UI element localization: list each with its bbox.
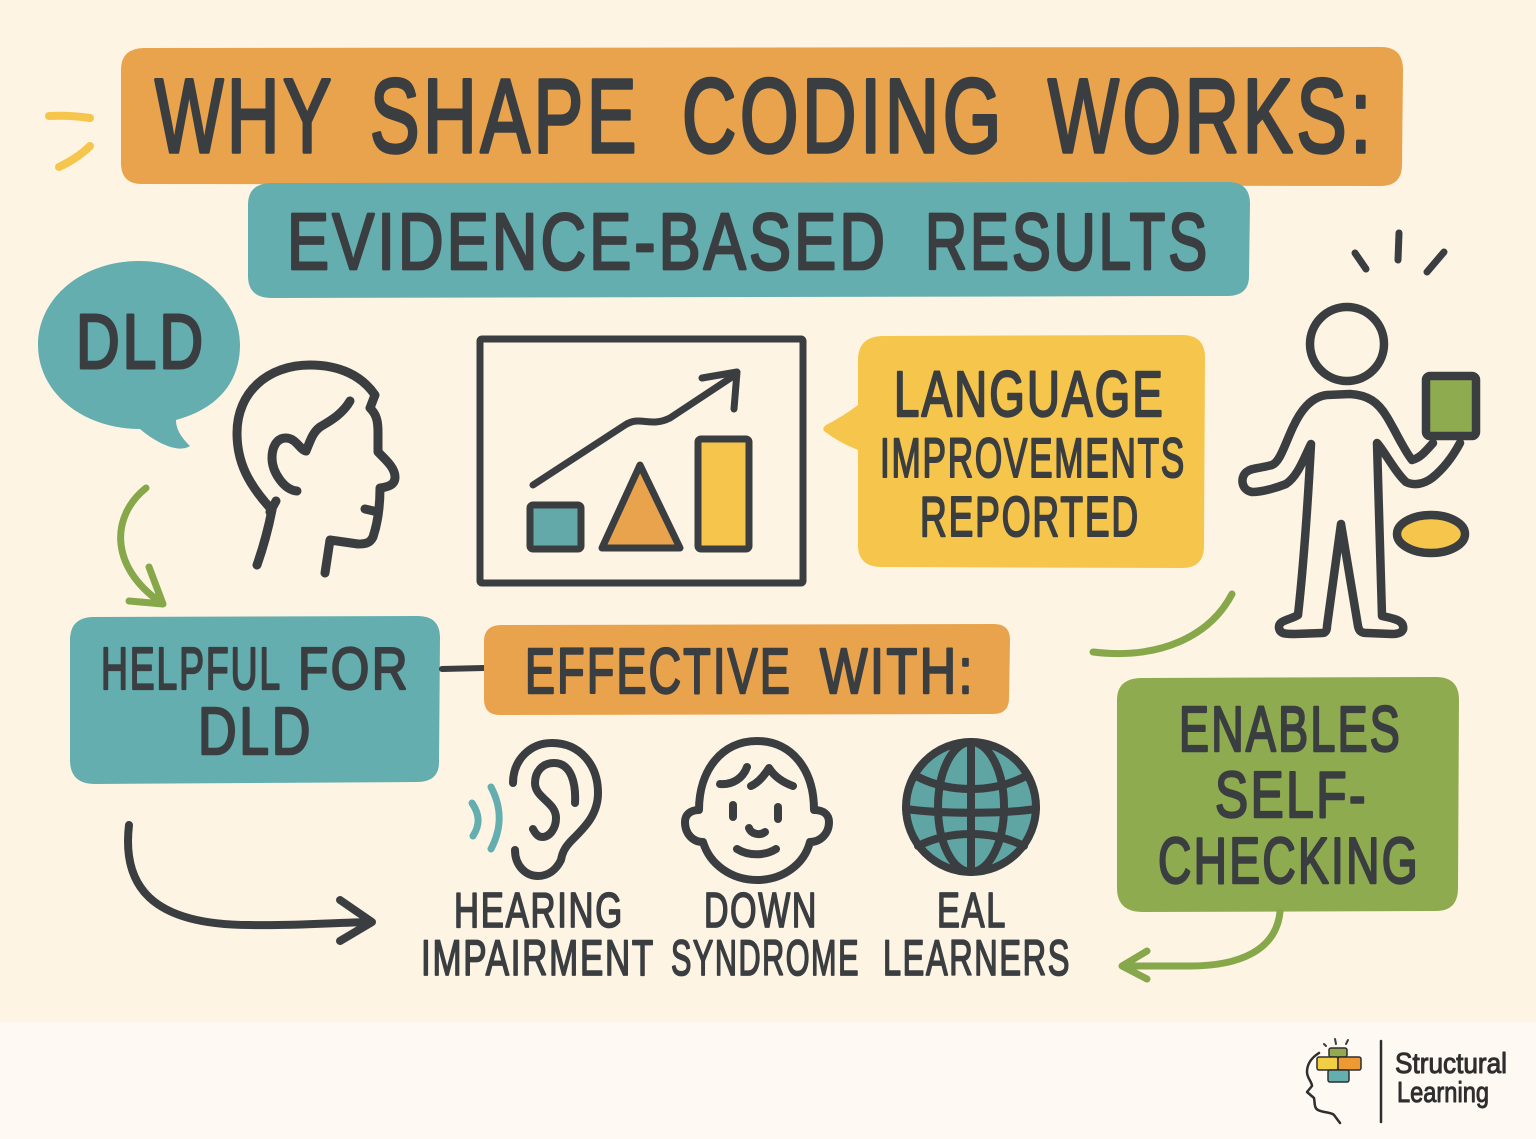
icon: head profile [237, 365, 395, 573]
rays [1355, 233, 1444, 272]
box: enables self-checking: SELF- [1215, 758, 1368, 831]
box: enables self-checking: ENABLES [1179, 693, 1402, 765]
logo: Structural Learning [1307, 1039, 1507, 1123]
icon: face [685, 741, 829, 880]
disc [1397, 515, 1465, 553]
subtitle banner [248, 182, 1250, 298]
box: enables self-checking [1117, 677, 1459, 912]
box: helpful for DLD: DLD [198, 694, 313, 769]
subtitle banner: RESULTS [925, 197, 1210, 286]
heading: effective with [484, 624, 1010, 715]
group: EAL learners [883, 742, 1071, 986]
title banner: SHAPE [370, 58, 640, 175]
icon: globe [906, 742, 1036, 872]
box: enables self-checking: CHECKING [1158, 824, 1420, 897]
person head [1310, 307, 1384, 381]
arrow: dark curved to audience icons [128, 825, 372, 941]
title banner [121, 47, 1403, 186]
heading: effective with: WITH: [820, 635, 975, 707]
curved green line [1093, 594, 1232, 654]
bar: teal square [530, 505, 581, 549]
logo wordmark: Structural [1395, 1048, 1507, 1080]
arrow: green from self-checking box [1122, 912, 1280, 979]
label [421, 884, 655, 986]
box: helpful for DLD [70, 616, 440, 784]
label [883, 884, 1071, 986]
logo wordmark [1395, 1048, 1507, 1109]
icon: person holding card [1242, 233, 1476, 634]
label [671, 884, 860, 986]
chart panel: rising results [480, 339, 803, 583]
callout: language improvements reported: IMPROVEMENTS [880, 426, 1186, 489]
callout: language improvements reported: LANGUAGE [894, 358, 1165, 430]
arrow: green from bubble to helpful box [121, 488, 163, 604]
logo divider [1380, 1041, 1382, 1122]
card [1426, 376, 1476, 436]
box: helpful for DLD: FOR [298, 636, 410, 702]
group: hearing impairment [421, 743, 655, 986]
speech bubble: DLD: DLD [76, 299, 206, 385]
logo wordmark: Learning [1397, 1077, 1489, 1109]
speech bubble: DLD [38, 261, 240, 449]
label: EAL [937, 884, 1007, 938]
subtitle banner: EVIDENCE-BASED [287, 197, 888, 286]
callout: language improvements reported: REPORTED [920, 485, 1140, 549]
label: HEARING [454, 884, 624, 938]
label: IMPAIRMENT [421, 930, 655, 986]
title banner: WHY [155, 58, 335, 175]
logo rays [1324, 1039, 1348, 1046]
arrow: rising trend [533, 372, 737, 485]
logo blocks [1317, 1048, 1361, 1082]
callout: language improvements reported [823, 335, 1205, 568]
bar: orange triangle [602, 465, 680, 548]
logo head [1307, 1053, 1340, 1123]
icon: decorative yellow dashes [49, 116, 90, 167]
label: DOWN [704, 884, 818, 938]
connector line [442, 668, 484, 669]
heading: effective with: EFFECTIVE [525, 635, 792, 707]
title banner: CODING [682, 58, 1005, 175]
label: SYNDROME [671, 930, 860, 986]
group: down syndrome [671, 741, 860, 986]
box: helpful for DLD: HELPFUL [101, 636, 282, 702]
title banner: WORKS: [1048, 58, 1375, 175]
person body [1242, 394, 1460, 634]
bar: yellow rectangle [698, 439, 749, 549]
icon: ear [472, 743, 598, 876]
label: LEARNERS [883, 930, 1071, 986]
